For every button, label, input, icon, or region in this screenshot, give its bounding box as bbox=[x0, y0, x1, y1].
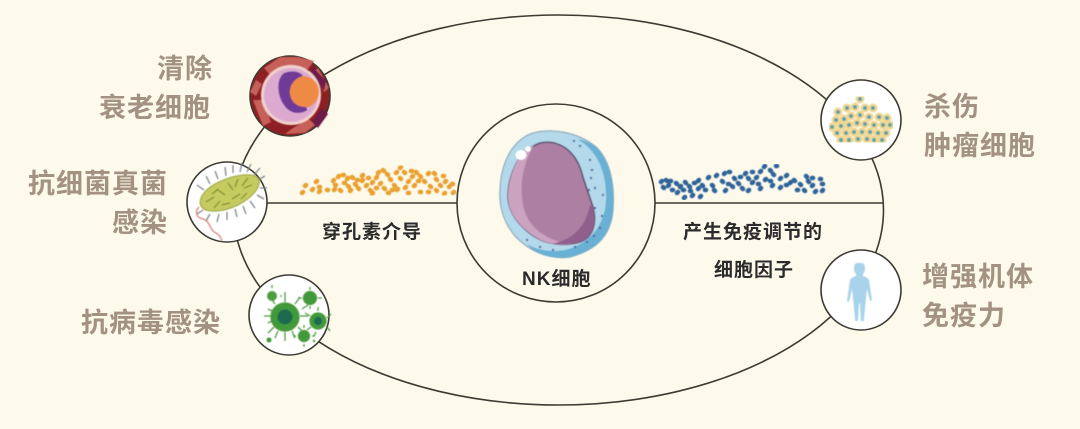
label: antibacterial antifungal: 抗细菌真菌 bbox=[28, 169, 168, 199]
NK label: NK细胞 bbox=[522, 268, 591, 290]
panel: orange perforin particles bbox=[302, 167, 454, 194]
panel: human body icon bbox=[821, 250, 901, 330]
panel: senescent cell icon bbox=[250, 56, 330, 136]
horizontal connector line bbox=[233, 202, 884, 204]
label: kill: 杀伤 bbox=[924, 92, 980, 122]
label: cytokine line 2: 细胞因子 bbox=[714, 259, 794, 281]
label: antiviral infection: 抗病毒感染 bbox=[81, 307, 221, 338]
outer ellipse bbox=[234, 15, 884, 405]
icon: NK cell body bbox=[500, 131, 613, 258]
panel: tumour cells icon bbox=[821, 80, 901, 160]
label: enhance: 增强机体 bbox=[922, 262, 1034, 292]
panel: blue cytokine particles bbox=[661, 166, 823, 198]
panel: virus icon bbox=[249, 275, 331, 355]
label: perforin mediated: 穿孔素介导 bbox=[322, 220, 422, 243]
label: senescent line 2: 衰老细胞 bbox=[99, 93, 211, 123]
panel: bacteria icon bbox=[187, 162, 267, 242]
label: immunity: 免疫力 bbox=[922, 301, 1006, 331]
label: cytokine line 1: 产生免疫调节的 bbox=[683, 220, 823, 243]
panel: NK cell bbox=[457, 104, 655, 302]
label: tumour cells: 肿瘤细胞 bbox=[924, 131, 1036, 161]
label: clear senescent cells: 清除 bbox=[157, 53, 213, 84]
label: infection: 感染 bbox=[112, 207, 168, 238]
